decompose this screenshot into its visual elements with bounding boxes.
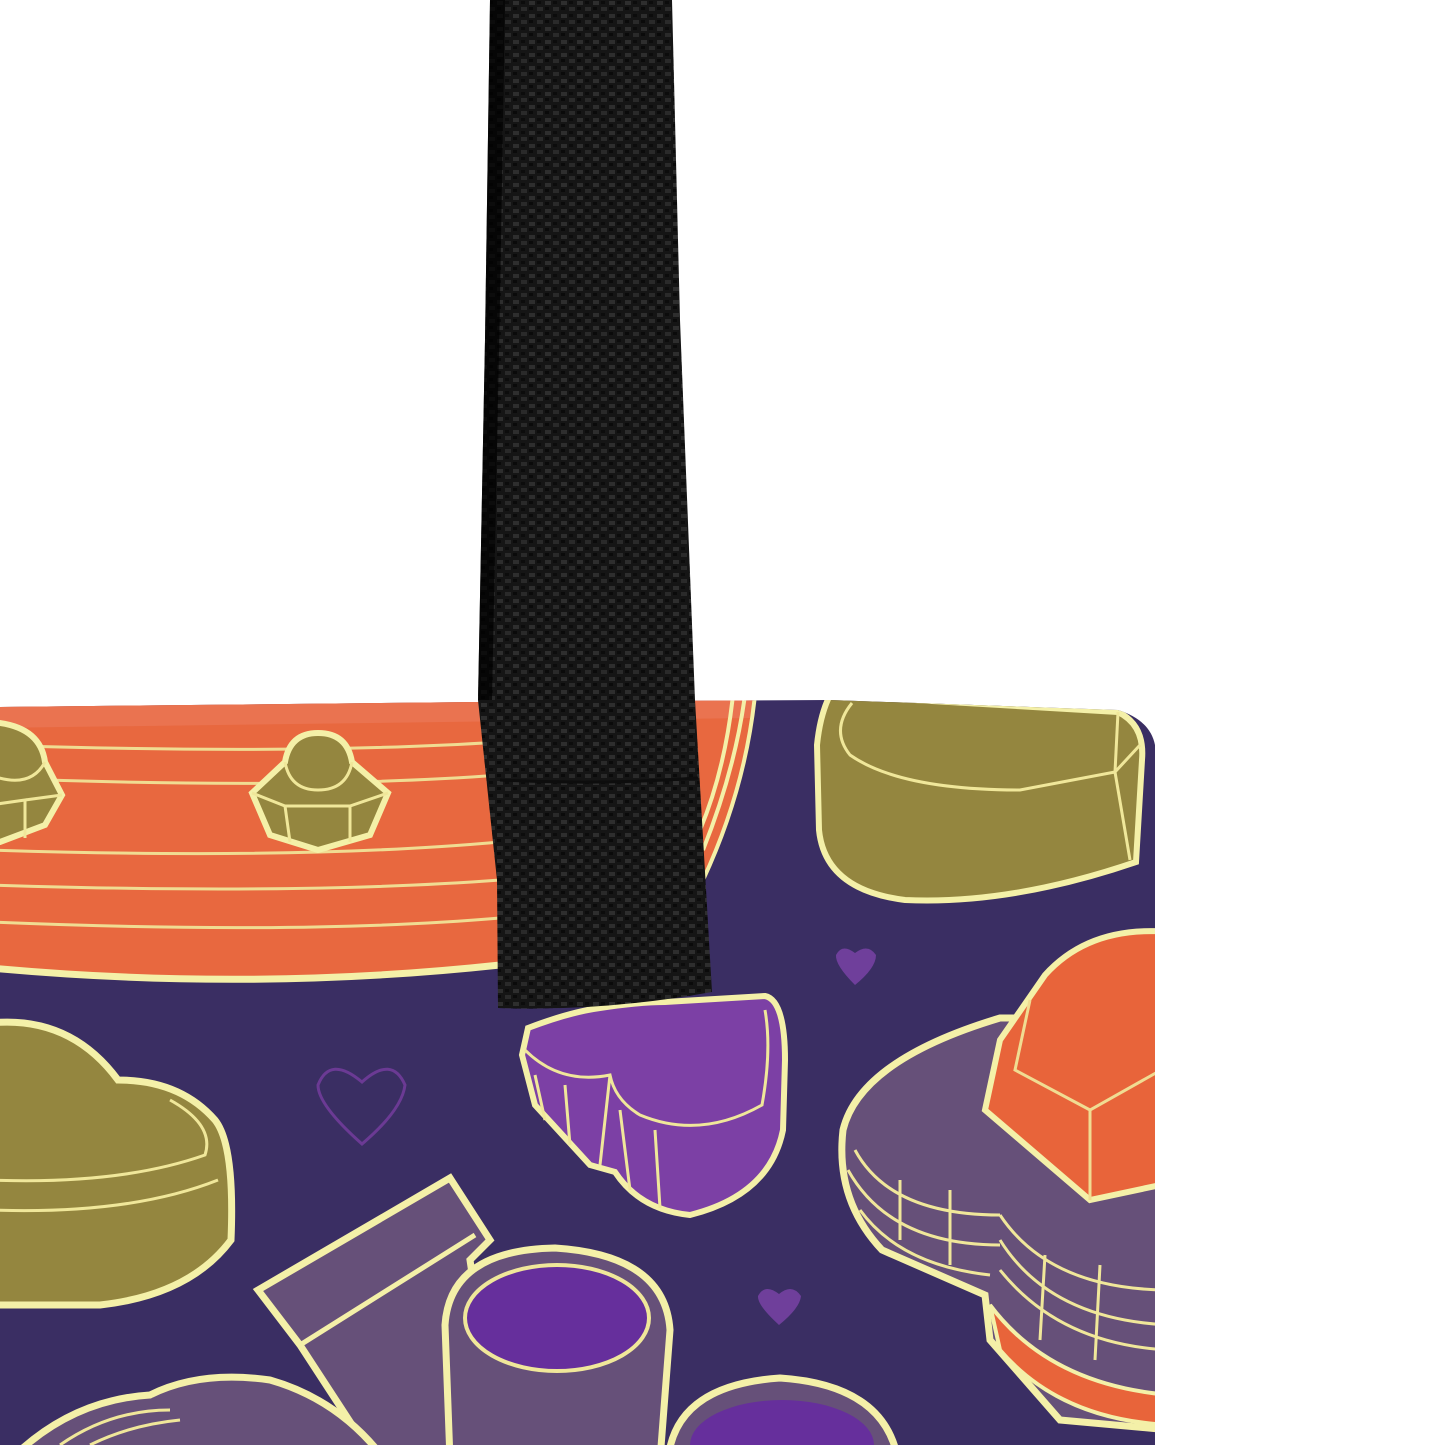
tote bag product photo (0, 0, 1155, 1445)
icon: cylinder (445, 1248, 670, 1445)
icon: olive block top right (817, 695, 1142, 901)
bag body (0, 690, 1170, 1445)
icon: mauve rectangular bar (258, 1178, 500, 1445)
orange block (985, 931, 1170, 1200)
strap (478, 0, 712, 1009)
icon: mauve stack bottom left (10, 1377, 385, 1445)
orange base (990, 1305, 1170, 1425)
icon: hex nut left (0, 722, 62, 842)
icon: small heart top (836, 948, 876, 985)
icon: small cylinder bottom (668, 1378, 898, 1445)
icon: olive heart left (0, 1022, 232, 1305)
icon: purple heart block (522, 996, 785, 1215)
orange band (0, 695, 755, 980)
icon: small heart bottom (758, 1289, 801, 1325)
icon: hex nut centre (252, 733, 388, 850)
icon: outline heart (318, 1069, 405, 1144)
icon: stacked mauve pieces with orange block (842, 931, 1170, 1430)
